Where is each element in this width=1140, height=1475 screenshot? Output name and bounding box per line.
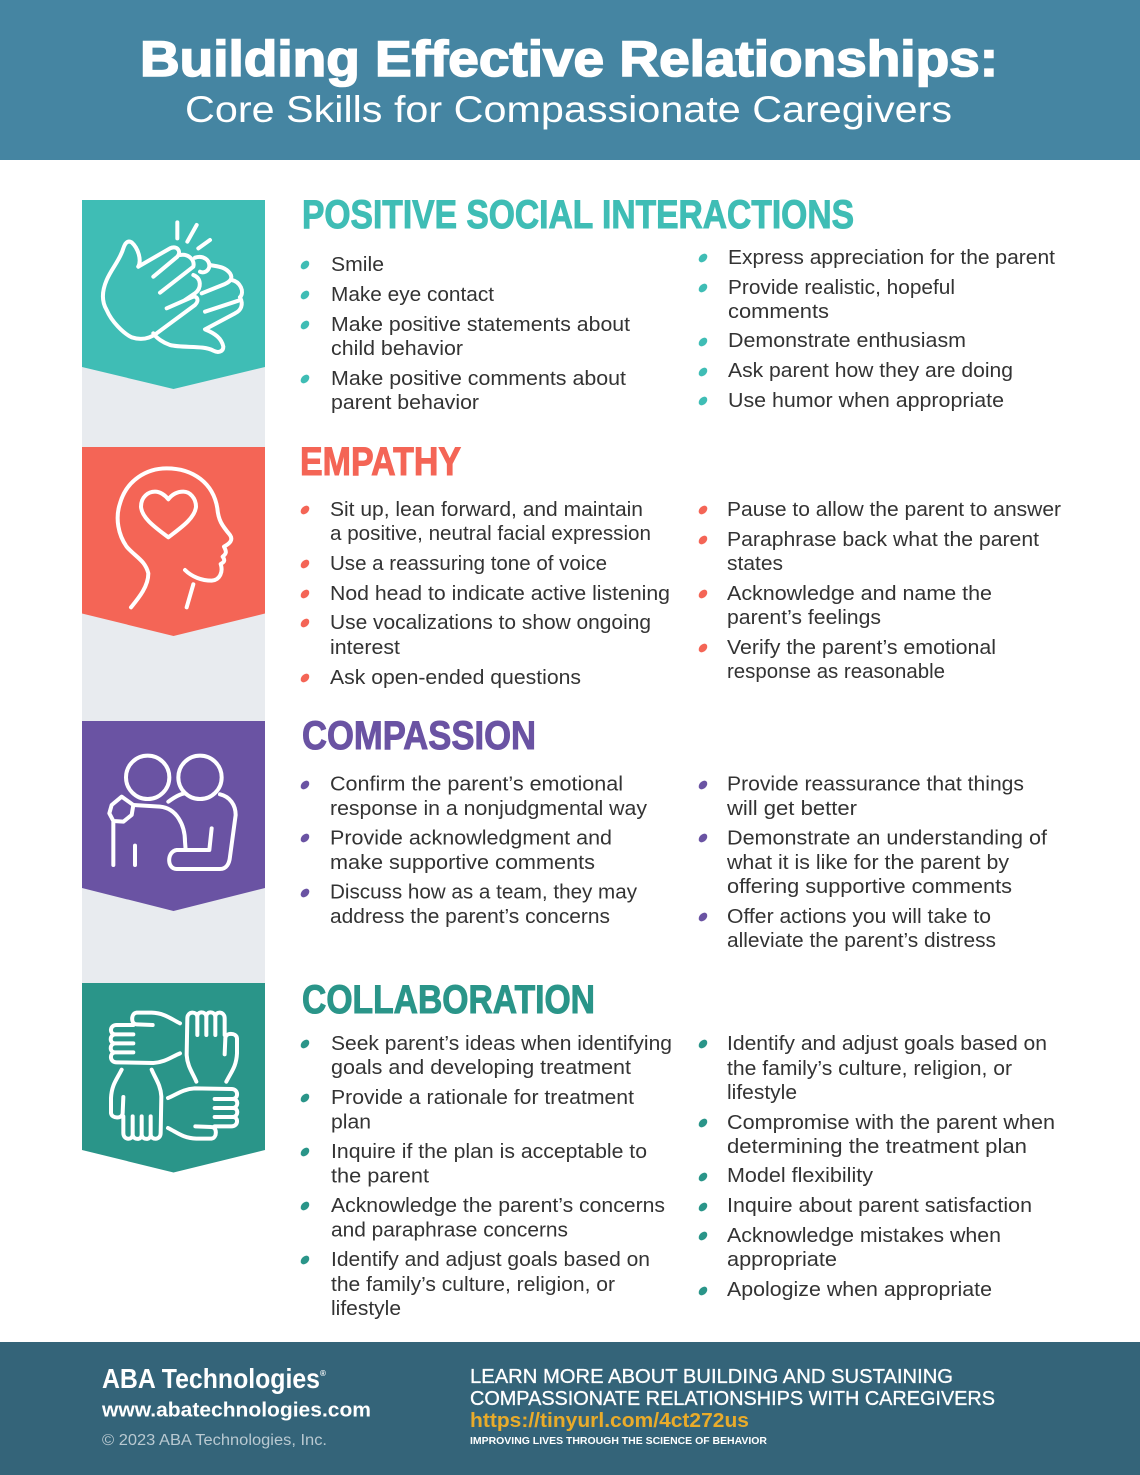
list: right column: Provide reassurance that things [727, 774, 1024, 796]
call to action: LEARN MORE ABOUT BUILDING AND SUSTAINING [470, 1366, 953, 1388]
list: left column: child behavior [331, 338, 463, 360]
list: left column: a positive, neutral facial expression [330, 523, 651, 545]
list: left column: the parent [331, 1166, 429, 1188]
list: right column: states [727, 553, 783, 575]
list: right column: lifestyle [727, 1082, 797, 1104]
list: right column: will get better [726, 798, 857, 820]
list: right column: Offer actions you will take to [727, 906, 991, 928]
list: right column: Model flexibility [727, 1165, 873, 1187]
list: left column: Provide a rationale for treatment [331, 1087, 634, 1109]
list: left column: Provide acknowledgment and [330, 828, 612, 850]
list: left column: response in a nonjudgmental way [330, 798, 647, 820]
list: right column: determining the treatment plan [727, 1136, 1027, 1158]
list: right column: Use humor when appropriate [728, 390, 1004, 412]
list: left column: Nod head to indicate active listening [330, 583, 670, 605]
list: left column: Discuss how as a team, they may [330, 882, 637, 904]
list: left column: Ask open-ended questions [330, 667, 581, 689]
list: right column: Compromise with the parent when [727, 1112, 1055, 1134]
header banner [0, 0, 1140, 160]
list: left column: Smile [331, 254, 384, 276]
icon: clapping hands [103, 222, 242, 352]
list: right column: Paraphrase back what the parent [727, 529, 1039, 551]
list: left column: Acknowledge the parent’s concerns [331, 1195, 665, 1217]
panel: collaboration [82, 978, 1055, 1320]
list: left column: the family’s culture, religion, or [331, 1274, 615, 1296]
list: right column: Ask parent how they are doing [728, 360, 1013, 382]
footer [0, 1342, 1140, 1475]
list: right column: the family’s culture, religion, or [727, 1058, 1012, 1080]
list: right column: Acknowledge mistakes when [727, 1225, 1001, 1247]
call to action [470, 1366, 995, 1410]
list: left column: Inquire if the plan is acceptable to [331, 1141, 647, 1163]
list: left column: interest [330, 637, 400, 659]
heading: EMPATHY [300, 440, 461, 484]
list: left column: plan [331, 1112, 371, 1134]
list: left column: and paraphrase concerns [331, 1220, 568, 1242]
copyright: © 2023 ABA Technologies, Inc. [102, 1432, 327, 1449]
heading: COMPASSION [302, 714, 536, 758]
panel: compassion [82, 714, 1047, 952]
icon: head with heart [118, 468, 231, 607]
list: left column [299, 1033, 672, 1320]
list: right column: Identify and adjust goals based on [727, 1033, 1047, 1055]
list: left column [299, 774, 647, 928]
list: right column [697, 1033, 1055, 1301]
list: right column: what it is like for the parent by [726, 852, 1009, 874]
list: right column: response as reasonable [727, 661, 945, 683]
call to action: COMPASSIONATE RELATIONSHIPS WITH CAREGIVERS [470, 1388, 995, 1410]
panel: empathy [82, 440, 1061, 689]
panel: positive social interactions [82, 193, 1055, 414]
list: left column: make supportive comments [330, 852, 595, 874]
list: right column: Apologize when appropriate [727, 1279, 992, 1301]
list: left column: Make positive comments about [331, 368, 626, 390]
list: left column: Identify and adjust goals based on [331, 1249, 650, 1271]
list: left column: Sit up, lean forward, and maintain [330, 499, 643, 521]
list: right column: Demonstrate enthusiasm [728, 330, 966, 352]
list: left column: goals and developing treatment [331, 1057, 631, 1079]
company logo wordmark: ® [320, 1369, 326, 1378]
ribbon background strip [82, 200, 265, 1000]
list: right column [697, 247, 1055, 412]
list: right column: alleviate the parent’s distress [727, 930, 996, 952]
list: left column: Make eye contact [331, 284, 494, 306]
ribbon: coral [82, 447, 265, 636]
list: left column: parent behavior [331, 392, 479, 414]
list: right column: parent’s feelings [727, 607, 881, 629]
list: right column: appropriate [727, 1249, 837, 1271]
list: right column: Inquire about parent satisfaction [727, 1195, 1032, 1217]
subtitle: Core Skills for Compassionate Caregivers [185, 89, 952, 130]
title: Building Effective Relationships: [140, 31, 998, 87]
list: right column: Demonstrate an understanding of [727, 828, 1047, 850]
list: left column: Confirm the parent’s emotional [330, 774, 623, 796]
list: right column [697, 499, 1061, 683]
list: right column: offering supportive comments [727, 876, 1012, 898]
list: right column: Provide realistic, hopeful [728, 277, 955, 299]
list: right column: comments [728, 301, 829, 323]
list: left column: Make positive statements about [331, 314, 630, 336]
ribbon: purple [82, 721, 265, 911]
icon: four interlocked hands [111, 1012, 237, 1139]
list: left column [299, 499, 670, 689]
list: left column: Use vocalizations to show ongoing [330, 612, 651, 634]
list: right column [697, 774, 1047, 952]
list: right column: Express appreciation for the parent [728, 247, 1055, 269]
list: right column: Pause to allow the parent to answer [727, 499, 1061, 521]
icon: two people with arm around shoulder [109, 756, 236, 869]
list: right column: Acknowledge and name the [727, 583, 992, 605]
website: www.abatechnologies.com [101, 1400, 371, 1422]
heading: COLLABORATION [302, 978, 595, 1022]
list: left column [299, 254, 630, 414]
heading: POSITIVE SOCIAL INTERACTIONS [302, 193, 854, 237]
ribbon: teal [82, 200, 265, 389]
list: left column: Seek parent’s ideas when identifying [331, 1033, 672, 1055]
tagline: IMPROVING LIVES THROUGH THE SCIENCE OF BEHAVIOR [470, 1436, 768, 1447]
list: left column: lifestyle [331, 1298, 401, 1320]
list: left column: Use a reassuring tone of voice [330, 553, 607, 575]
list: left column: address the parent’s concerns [330, 906, 610, 928]
list: right column: Verify the parent’s emotional [727, 637, 996, 659]
link: https://tinyurl.com/4ct272us [470, 1410, 749, 1432]
company logo wordmark: ABA Technologies [102, 1363, 320, 1394]
ribbon: green [82, 983, 265, 1172]
